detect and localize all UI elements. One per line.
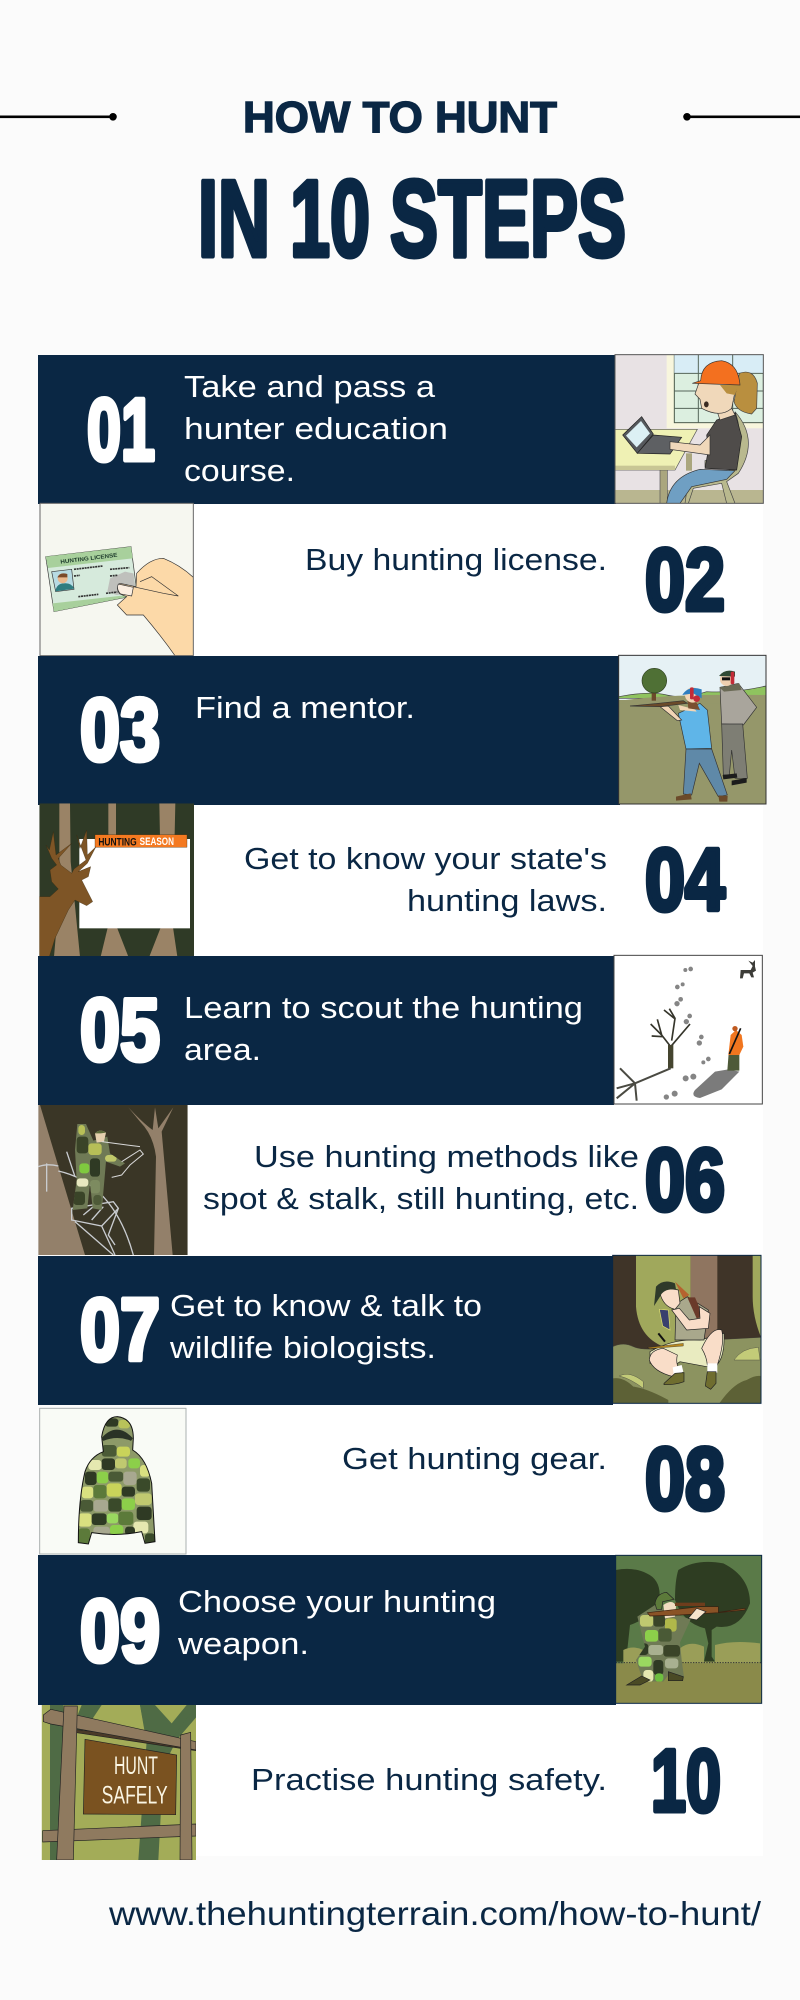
step 7 text: wildlife biologists. — [169, 1330, 436, 1365]
step 2 — [40, 503, 763, 656]
step 3 number: 03 — [80, 680, 160, 779]
step 8 panel — [186, 1405, 763, 1555]
step 10 — [42, 1705, 763, 1860]
icon: hunt safely sign: HUNT — [114, 1753, 158, 1780]
step 9 number: 09 — [80, 1581, 160, 1680]
icon: woman studying on laptop — [615, 355, 763, 503]
right decorative line with dot — [683, 113, 800, 121]
step 2 number: 02 — [645, 530, 725, 629]
icon: hand holding hunting license — [40, 503, 193, 656]
step 8 — [40, 1405, 763, 1555]
icon: hunter scouting tracks in snow — [614, 955, 762, 1104]
icon: hunting season board with deer: SEASON — [140, 836, 174, 848]
step 4 panel — [194, 805, 763, 956]
step 6 text: spot & stalk, still hunting, etc. — [203, 1181, 639, 1216]
step 2 text: Buy hunting license. — [305, 542, 607, 577]
icon: hunt safely sign: SAFELY — [102, 1782, 168, 1809]
step 6 text — [203, 1139, 639, 1216]
step 3 bar — [38, 656, 620, 805]
icon: wildlife biologist taking notes — [613, 1255, 761, 1403]
left decorative line with dot — [0, 113, 117, 121]
icon: bow hunter in tree stand — [38, 1105, 188, 1255]
step 10 text: Practise hunting safety. — [251, 1762, 607, 1797]
step 6 panel — [188, 1105, 763, 1256]
step 4 — [39, 803, 763, 957]
step 7 — [38, 1255, 761, 1405]
step 1 bar — [38, 355, 616, 504]
icon: hand holding hunting license: HUNTING LICENSE — [60, 553, 118, 566]
step 10 number: 10 — [651, 1731, 721, 1830]
step 5 — [38, 955, 762, 1105]
step 4 text: hunting laws. — [407, 883, 607, 918]
step 5 text: area. — [184, 1032, 261, 1067]
step 9 — [38, 1555, 762, 1705]
step 5 number: 05 — [80, 980, 160, 1079]
step 1 number: 01 — [87, 380, 155, 479]
step 9 text — [177, 1584, 496, 1661]
step 5 bar — [38, 956, 614, 1105]
step 7 bar — [38, 1256, 613, 1405]
step 9 bar — [38, 1555, 616, 1705]
step 6 text: Use hunting methods like — [254, 1139, 639, 1174]
step 4 text: Get to know your state's — [244, 841, 607, 876]
step 3 text: Find a mentor. — [195, 690, 415, 725]
title: how to hunt: HOW TO HUNT — [243, 93, 557, 142]
step 7 number: 07 — [80, 1280, 160, 1379]
icon: kneeling hunter aiming rifle — [616, 1555, 762, 1703]
step 1 text: course. — [184, 453, 295, 488]
step 1 text — [184, 369, 448, 488]
step 5 text: Learn to scout the hunting — [184, 990, 583, 1025]
icon: hunt safely sign — [42, 1705, 197, 1860]
step 1 text: Take and pass a — [184, 369, 436, 404]
icon: camouflage jacket — [40, 1408, 186, 1554]
step 8 number: 08 — [645, 1429, 725, 1528]
step 1 — [38, 355, 763, 504]
step 2 panel — [193, 504, 763, 656]
step 9 text: weapon. — [177, 1626, 309, 1661]
step 4 text — [244, 841, 607, 918]
step 8 text: Get hunting gear. — [342, 1441, 607, 1476]
step 7 text: Get to know & talk to — [170, 1288, 482, 1323]
step 9 text: Choose your hunting — [178, 1584, 496, 1619]
header — [0, 93, 800, 280]
step 5 text — [184, 990, 583, 1067]
step 1 text: hunter education — [184, 411, 448, 446]
icon: hunting season board with deer: HUNTING — [98, 836, 137, 848]
step 6 number: 06 — [645, 1130, 725, 1229]
footer url: www.thehuntingterrain.com/how-to-hunt/ — [108, 1896, 762, 1933]
step 10 panel — [196, 1705, 763, 1856]
step 3 — [38, 655, 766, 805]
icon: hunting season board with deer — [39, 803, 194, 957]
step 4 number: 04 — [645, 830, 725, 929]
step 6 — [38, 1105, 763, 1256]
step 7 text — [169, 1288, 482, 1365]
icon: hunter with mentor at range — [619, 655, 766, 804]
